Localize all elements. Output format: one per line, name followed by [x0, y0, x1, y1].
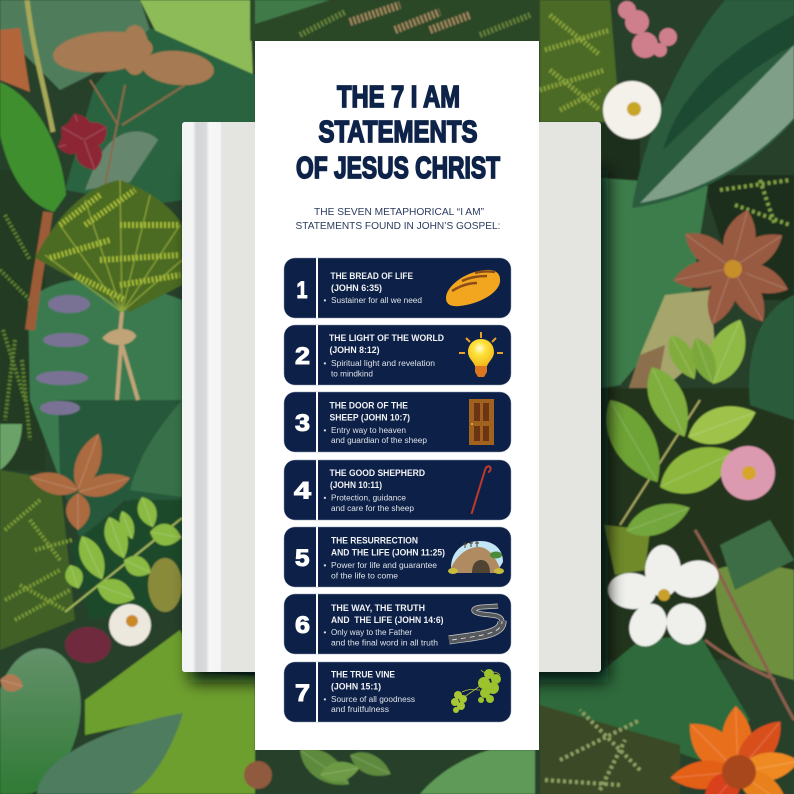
heading 6 — [331, 603, 444, 625]
title — [296, 79, 500, 185]
leaf: brown corner — [0, 28, 30, 92]
heading 1 — [330, 271, 413, 293]
fern strands — [0, 215, 30, 440]
panel: statement 1 — [284, 258, 511, 318]
heading 5: THE RESURRECTION — [331, 536, 418, 546]
stem: brown stick — [30, 212, 48, 330]
yellow leaves — [604, 525, 650, 575]
heading 2 — [329, 333, 444, 355]
title: THE 7 I AM — [337, 79, 460, 114]
number 6: 6 — [295, 612, 310, 639]
leaf: left bright — [0, 82, 66, 212]
description 6: • — [324, 628, 326, 637]
top strip green sprigs — [300, 12, 530, 35]
subtitle — [296, 206, 500, 232]
heading 7: THE TRUE VINE — [331, 670, 395, 680]
dried patch bottom — [244, 761, 272, 789]
leaf: large mid left green — [28, 279, 182, 520]
description 3: • — [324, 426, 326, 435]
number 1: 1 — [296, 277, 308, 304]
daisy: top right — [603, 81, 661, 139]
leaf: right dark — [749, 295, 794, 420]
heading 3: THE DOOR OF THE — [330, 401, 408, 411]
small leaf — [116, 509, 138, 541]
leaf: upper left dark green — [65, 28, 255, 205]
pale green leaf patch — [720, 520, 794, 590]
leaf: bottom centre — [420, 750, 535, 794]
leaf: below top right, green — [601, 178, 708, 388]
leaf: top right dark band — [663, 15, 794, 150]
twine bundle — [105, 312, 138, 400]
leaf: mid left dark — [58, 400, 182, 540]
leaf: dark behind small branch — [70, 500, 182, 620]
flower: large white — [607, 545, 723, 653]
number 2: 2 — [295, 343, 310, 370]
book shadow — [190, 170, 608, 682]
green leaf — [637, 360, 700, 444]
book spine — [182, 122, 222, 672]
number 3: 3 — [295, 410, 310, 437]
leaf: bottom small — [346, 746, 395, 783]
leaf: bottom sprig 2 — [318, 758, 361, 785]
top strip leaf — [255, 0, 330, 24]
flower: pink right — [721, 446, 775, 500]
icon: empty tomb — [448, 541, 504, 574]
leaf: grey green bottom — [37, 713, 183, 794]
heading 4 — [330, 468, 425, 490]
moss patch — [625, 290, 715, 400]
heading 6: THE WAY, THE TRUTH — [331, 603, 425, 613]
heading 3 — [330, 401, 410, 423]
description 1: • — [324, 296, 326, 305]
leaf: bottom sprigs — [293, 739, 357, 794]
moss: lower right — [715, 564, 794, 680]
subtitle: STATEMENTS FOUND IN JOHN’S GOSPEL: — [296, 220, 500, 232]
green leaf — [686, 334, 723, 387]
daisy: lower left — [109, 604, 151, 646]
icon: light bulb — [459, 332, 503, 377]
green leaf — [592, 390, 675, 493]
panel: statement 2 — [284, 325, 511, 385]
right: yarrow cluster — [540, 0, 620, 122]
leaf: far left pale — [0, 424, 22, 470]
flower: dark pink — [65, 627, 111, 663]
white bookmark card — [255, 41, 539, 750]
bottom sprigs — [545, 710, 640, 790]
flower: orange — [669, 706, 794, 794]
leaf: mid left lighter — [130, 400, 182, 497]
heading 6: AND THE LIFE (JOHN 14:6) — [331, 615, 444, 625]
heading 5 — [331, 536, 445, 558]
leaf: top-left dull green — [0, 0, 150, 90]
description 7: and fruitfulness — [331, 705, 389, 714]
number 5: 5 — [295, 545, 310, 572]
leaf: bright bottom centre — [85, 630, 255, 794]
heading 7: (JOHN 15:1) — [331, 682, 381, 692]
bottom foliage band — [540, 705, 680, 794]
description 5: of the life to come — [331, 572, 399, 580]
description 5: Power for life and guarantee — [331, 561, 438, 570]
lavender sprigs — [36, 295, 90, 415]
description 4: and care for the sheep — [331, 504, 415, 513]
yarrow stems — [45, 180, 182, 312]
description 3: and guardian of the sheep — [331, 436, 428, 445]
leaf: brown flower four petals — [27, 430, 133, 530]
book cover — [182, 122, 601, 672]
heading 3: SHEEP (JOHN 10:7) — [330, 413, 410, 423]
icon: door — [469, 399, 494, 445]
icon: grape vine — [451, 669, 501, 713]
description 4: • — [324, 494, 326, 502]
heading 2: (JOHN 8:12) — [330, 345, 380, 355]
green leaf — [697, 313, 756, 391]
yarrow bundle — [35, 180, 182, 312]
description 7: Source of all goodness — [331, 695, 415, 704]
icon: winding road — [449, 606, 502, 640]
lower right dark foliage — [601, 388, 794, 660]
heading 4: THE GOOD SHEPHERD — [330, 468, 425, 478]
number 7: 7 — [295, 680, 310, 707]
heading 7 — [331, 670, 395, 692]
white book — [182, 122, 601, 672]
green leaf — [621, 494, 695, 544]
top strip dried flowers — [350, 5, 470, 30]
gold moss — [148, 558, 182, 612]
description 7 — [324, 695, 415, 714]
description 6: Only way to the Father — [331, 628, 412, 637]
leaf: grey green — [85, 131, 158, 190]
icon: bread — [446, 270, 500, 306]
small leaf — [62, 562, 87, 591]
flower: brown right — [671, 206, 793, 329]
description 6: and the final word in all truth — [331, 638, 438, 648]
heading 1: THE BREAD OF LIFE — [330, 271, 413, 281]
green leaf — [682, 396, 762, 453]
description 2 — [324, 359, 435, 378]
right: yarrow detail — [540, 15, 610, 110]
pink flower cluster — [618, 1, 677, 58]
heading 5: AND THE LIFE (JOHN 11:25) — [331, 548, 445, 558]
small leaf — [99, 513, 134, 562]
yarrow head — [35, 180, 182, 312]
description 4 — [324, 494, 415, 513]
icon: shepherd's crook — [472, 466, 491, 514]
moss bark — [625, 345, 665, 400]
leaf: top right pale section — [640, 45, 794, 203]
panel: statement 7 — [284, 662, 511, 722]
description 2: Spiritual light and revelation — [331, 359, 435, 368]
title: STATEMENTS — [318, 114, 478, 149]
small leaf — [133, 494, 162, 530]
description 1: Sustainer for all we need — [331, 296, 422, 305]
top strip foliage — [250, 0, 540, 41]
title: OF JESUS CHRIST — [296, 150, 500, 185]
moss strands — [5, 500, 72, 620]
description 6 — [324, 628, 438, 648]
panel: statement 5 — [284, 527, 511, 587]
leaf: brown tip far left — [0, 672, 25, 695]
leaf: bottom left large — [0, 648, 81, 794]
heading 2: THE LIGHT OF THE WORLD — [329, 333, 444, 343]
number 4: 4 — [294, 478, 312, 504]
leaf: top right big dark — [632, 0, 794, 208]
right stems — [620, 400, 700, 525]
flower: red — [55, 110, 112, 175]
panel: statement 3 — [284, 392, 511, 452]
description 5: • — [324, 561, 326, 570]
panel: statement 4 — [284, 460, 511, 520]
heading 1: (JOHN 6:35) — [331, 283, 382, 293]
subtitle: THE SEVEN METAPHORICAL “I AM” — [314, 206, 484, 218]
description 7: • — [324, 695, 326, 704]
small leaf — [120, 551, 155, 582]
panel: statement 6 — [284, 594, 511, 654]
green leaf — [661, 330, 704, 384]
leaf: lower right big green — [540, 635, 750, 760]
leaf: top centre bright green — [140, 0, 253, 80]
description 3 — [324, 426, 428, 445]
right: dark foliage band — [601, 122, 794, 300]
stem: upper left — [27, 0, 53, 132]
description 2: to mindkind — [331, 370, 373, 378]
description 3: Entry way to heaven — [331, 426, 406, 435]
heading 4: (JOHN 10:11) — [330, 480, 382, 490]
fern strip: left edge — [0, 170, 45, 470]
small leaf — [148, 521, 183, 548]
branch with small leaves — [62, 494, 183, 612]
right twigs — [695, 530, 794, 720]
right green leaves — [592, 313, 762, 544]
description 4: Protection, guidance — [331, 494, 407, 502]
green leaf — [651, 434, 743, 506]
dried flower: stems — [90, 80, 185, 210]
small leaf — [72, 531, 112, 584]
right: green sprigs — [720, 180, 790, 225]
small leaf — [93, 574, 139, 610]
yarrow florets — [50, 190, 180, 300]
description 2: • — [324, 359, 326, 368]
dried flower: clusters — [51, 25, 215, 88]
moss left — [0, 470, 75, 650]
description 5 — [324, 561, 438, 580]
